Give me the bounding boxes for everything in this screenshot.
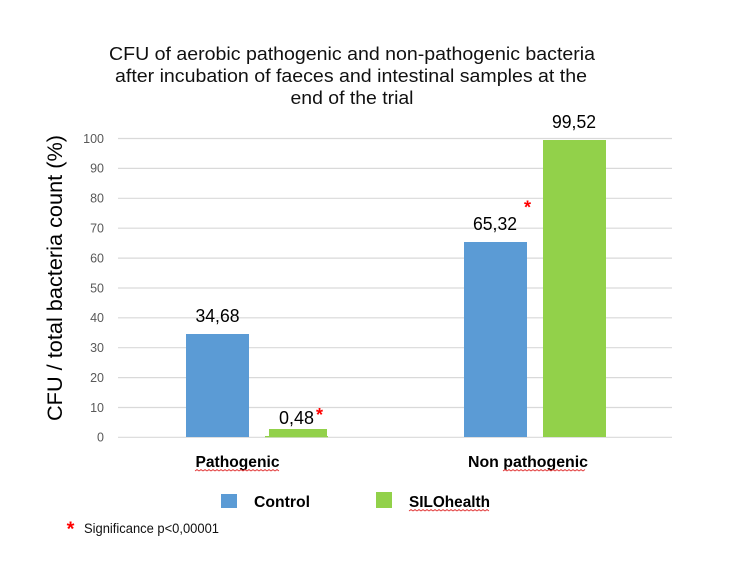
y-axis title: CFU / total bacteria count (%) bbox=[44, 135, 67, 421]
title: CFU of aerobic pathogenic and non-pathogenic bacteria bbox=[109, 44, 596, 64]
title: end of the trial bbox=[290, 88, 414, 108]
value labels: 34,68 bbox=[196, 306, 240, 326]
y-axis tick labels: 0 bbox=[97, 430, 104, 444]
bar: Pathogenic SILOhealth bbox=[265, 429, 328, 437]
y-axis tick labels: 70 bbox=[90, 222, 104, 236]
category label: Pathogenic: Pathogenic bbox=[196, 454, 280, 471]
y-axis tick labels: 50 bbox=[90, 282, 104, 296]
legend: Control bbox=[221, 494, 310, 511]
bar: Non pathogenic Control bbox=[464, 242, 527, 437]
significance asterisks: * bbox=[316, 405, 323, 425]
y-axis tick labels: 40 bbox=[90, 311, 104, 325]
value labels: 0,48 bbox=[279, 408, 314, 428]
y-axis tick labels bbox=[83, 132, 104, 444]
title bbox=[109, 44, 596, 108]
category label: Non pathogenic: Non pathogenic bbox=[468, 454, 588, 471]
significance asterisks bbox=[316, 198, 531, 425]
bar: Non pathogenic SILOhealth bbox=[543, 140, 606, 437]
y-axis tick labels: 90 bbox=[90, 162, 104, 176]
y-axis tick labels: 80 bbox=[90, 192, 104, 206]
significance note bbox=[67, 518, 219, 540]
y-axis tick labels: 20 bbox=[90, 371, 104, 385]
significance note: * bbox=[67, 518, 75, 540]
value labels bbox=[196, 112, 596, 428]
y-axis tick labels: 10 bbox=[90, 401, 104, 415]
legend: Control: Control bbox=[254, 494, 310, 511]
significance asterisks: * bbox=[524, 198, 531, 218]
significance note: Significance p<0,00001 bbox=[84, 521, 219, 536]
value labels: 65,32 bbox=[473, 214, 517, 234]
y-axis tick labels: 60 bbox=[90, 252, 104, 266]
value labels: 99,52 bbox=[552, 112, 596, 132]
title: after incubation of faeces and intestinal samples at the bbox=[115, 66, 587, 86]
y-axis tick labels: 30 bbox=[90, 341, 104, 355]
legend: SILOhealth bbox=[376, 492, 490, 511]
bar: Pathogenic Control bbox=[186, 334, 249, 437]
legend: SILOhealth: SILOhealth bbox=[409, 494, 490, 511]
y-axis tick labels: 100 bbox=[83, 132, 104, 146]
